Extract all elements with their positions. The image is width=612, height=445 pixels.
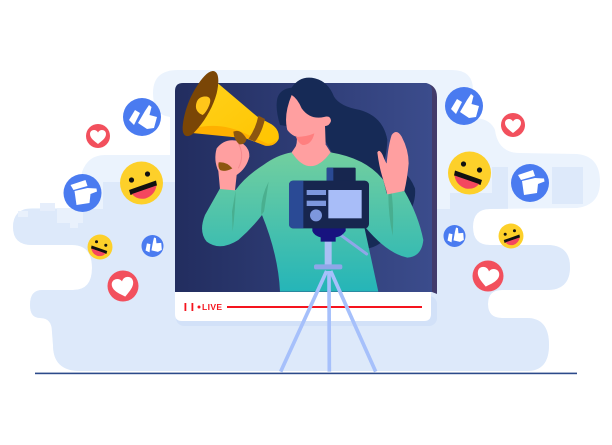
face <box>286 95 331 138</box>
icon: heart top left <box>86 124 110 148</box>
hair <box>277 78 415 248</box>
camera screen <box>328 190 362 218</box>
panel shadow <box>176 296 437 326</box>
live controls <box>184 302 422 312</box>
icon: small smiley left <box>88 235 112 259</box>
background buildings <box>18 203 83 228</box>
panel: live video window <box>175 83 437 326</box>
handle grip <box>218 162 232 171</box>
icon: like rotated right <box>511 164 549 202</box>
collar skin <box>292 145 331 166</box>
video background <box>175 83 432 292</box>
camera viewfinder <box>327 168 356 182</box>
ground line <box>35 373 577 374</box>
icon: heart top right <box>501 113 525 137</box>
tripod legs <box>281 271 376 372</box>
background cloud: lower darker tone <box>13 167 583 371</box>
tripod head <box>312 228 346 242</box>
camera buttons <box>307 190 326 221</box>
icon: small like left <box>142 235 164 257</box>
icon: small like right <box>444 225 466 247</box>
woman with megaphone <box>183 71 423 292</box>
holding hand <box>215 140 249 190</box>
background cloud: lighter silhouette <box>13 70 600 371</box>
tripod handle <box>338 233 367 254</box>
strap <box>248 116 265 142</box>
icon: big smiley right <box>448 152 491 194</box>
icon: big smiley left <box>120 162 163 204</box>
neck <box>292 125 326 158</box>
camera body <box>289 181 369 228</box>
panel side edge <box>425 83 437 294</box>
tripod collar <box>314 264 342 269</box>
icon: small smiley right <box>499 224 523 248</box>
camera on tripod <box>281 168 376 372</box>
smile shadow <box>296 133 314 145</box>
icon: like top right <box>445 87 483 125</box>
control bar <box>175 292 431 321</box>
icon: heart bottom left <box>108 270 138 302</box>
torso and arms <box>202 152 423 292</box>
megaphone <box>183 71 279 146</box>
tripod column <box>325 240 332 268</box>
bell rim <box>183 71 218 136</box>
icon: like rotated left <box>64 174 102 212</box>
horn <box>191 80 279 146</box>
raised hand <box>377 132 409 194</box>
icon: heart bottom right <box>472 260 504 292</box>
bell inner <box>196 97 210 115</box>
icon: like top left <box>123 98 161 136</box>
live controls: LIVE <box>202 302 222 312</box>
sleeve folds <box>232 182 393 236</box>
